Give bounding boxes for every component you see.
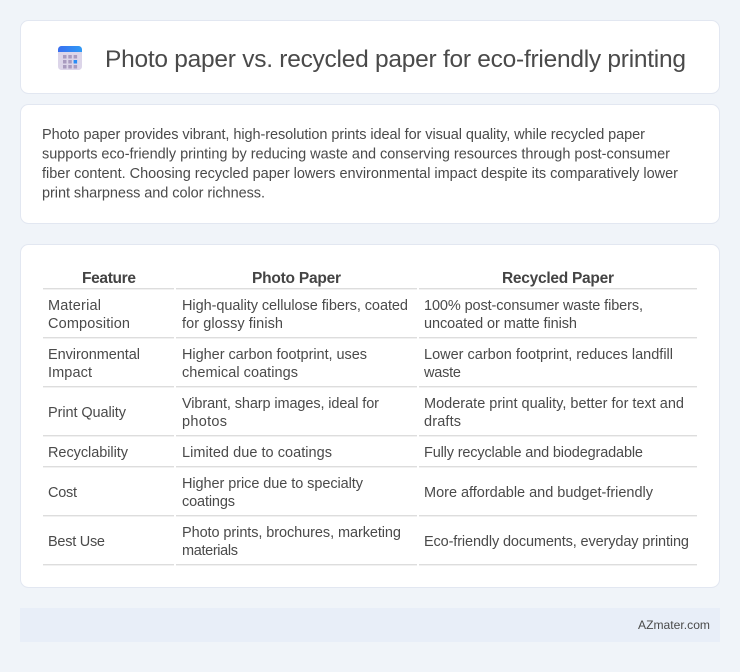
row: best use: Eco-friendly documents, everyday printing bbox=[424, 534, 689, 550]
row: cost bbox=[43, 476, 697, 516]
panel: header bbox=[20, 20, 720, 94]
table header row bbox=[43, 270, 697, 289]
panel: description bbox=[20, 104, 720, 224]
row: print quality: Print Quality bbox=[48, 405, 127, 421]
description text: Photo paper provides vibrant, high-resolution prints ideal for visual quality, while recycled paper bbox=[42, 127, 645, 143]
table header row: Recycled Paper bbox=[502, 270, 614, 287]
row: print quality bbox=[43, 396, 697, 436]
row: material composition: Composition bbox=[48, 316, 130, 332]
row: recyclability bbox=[43, 445, 697, 467]
icon: calendar bbox=[58, 46, 82, 70]
description text bbox=[42, 127, 678, 202]
row: best use: materials bbox=[182, 543, 238, 559]
row: best use: Best Use bbox=[48, 534, 105, 550]
title: Photo paper vs. recycled paper for eco-friendly printing bbox=[105, 46, 686, 73]
row: cost: Higher price due to specialty bbox=[182, 476, 364, 492]
row: material composition: Material bbox=[48, 298, 101, 314]
row: cost: coatings bbox=[182, 494, 235, 510]
row: print quality: Vibrant, sharp images, ideal for bbox=[182, 396, 379, 412]
row: best use: Photo prints, brochures, marketing bbox=[182, 525, 401, 541]
row: cost: Cost bbox=[48, 485, 77, 501]
row: material composition: uncoated or matte finish bbox=[424, 316, 577, 332]
row: environmental impact: chemical coatings bbox=[182, 365, 298, 381]
row: recyclability: Fully recyclable and biodegradable bbox=[424, 445, 643, 461]
row: best use bbox=[43, 525, 697, 565]
row: material composition: High-quality cellulose fibers, coated bbox=[182, 298, 408, 314]
row: environmental impact: waste bbox=[423, 365, 461, 381]
table header row: Feature bbox=[82, 270, 136, 287]
footer bbox=[20, 608, 720, 642]
table header row: Photo Paper bbox=[252, 270, 341, 287]
row: environmental impact: Environmental bbox=[48, 347, 140, 363]
row: recyclability: Recyclability bbox=[48, 445, 129, 461]
row: print quality: photos bbox=[182, 414, 227, 430]
row: print quality: drafts bbox=[424, 414, 461, 430]
panel: comparison table bbox=[20, 244, 720, 588]
row: material composition bbox=[43, 298, 697, 338]
footer credit: AZmater.com bbox=[638, 618, 710, 632]
row: environmental impact: Lower carbon footprint, reduces landfill bbox=[424, 347, 673, 363]
row: environmental impact bbox=[43, 347, 697, 387]
description text: print sharpness and color richness. bbox=[42, 186, 265, 202]
row: recyclability: Limited due to coatings bbox=[182, 445, 332, 461]
row: environmental impact: Impact bbox=[48, 365, 92, 381]
row: print quality: Moderate print quality, better for text and bbox=[424, 396, 684, 412]
description text: fiber content. Choosing recycled paper lowers environmental impact despite its comparatively lower bbox=[42, 166, 678, 182]
row: cost: More affordable and budget-friendly bbox=[424, 485, 654, 501]
description text: supports eco-friendly printing by reducing waste and conserving resources through post-consumer bbox=[42, 146, 670, 162]
row: environmental impact: Higher carbon footprint, uses bbox=[182, 347, 367, 363]
row: material composition: for glossy finish bbox=[182, 316, 283, 332]
row: material composition: 100% post-consumer waste fibers, bbox=[424, 298, 643, 314]
